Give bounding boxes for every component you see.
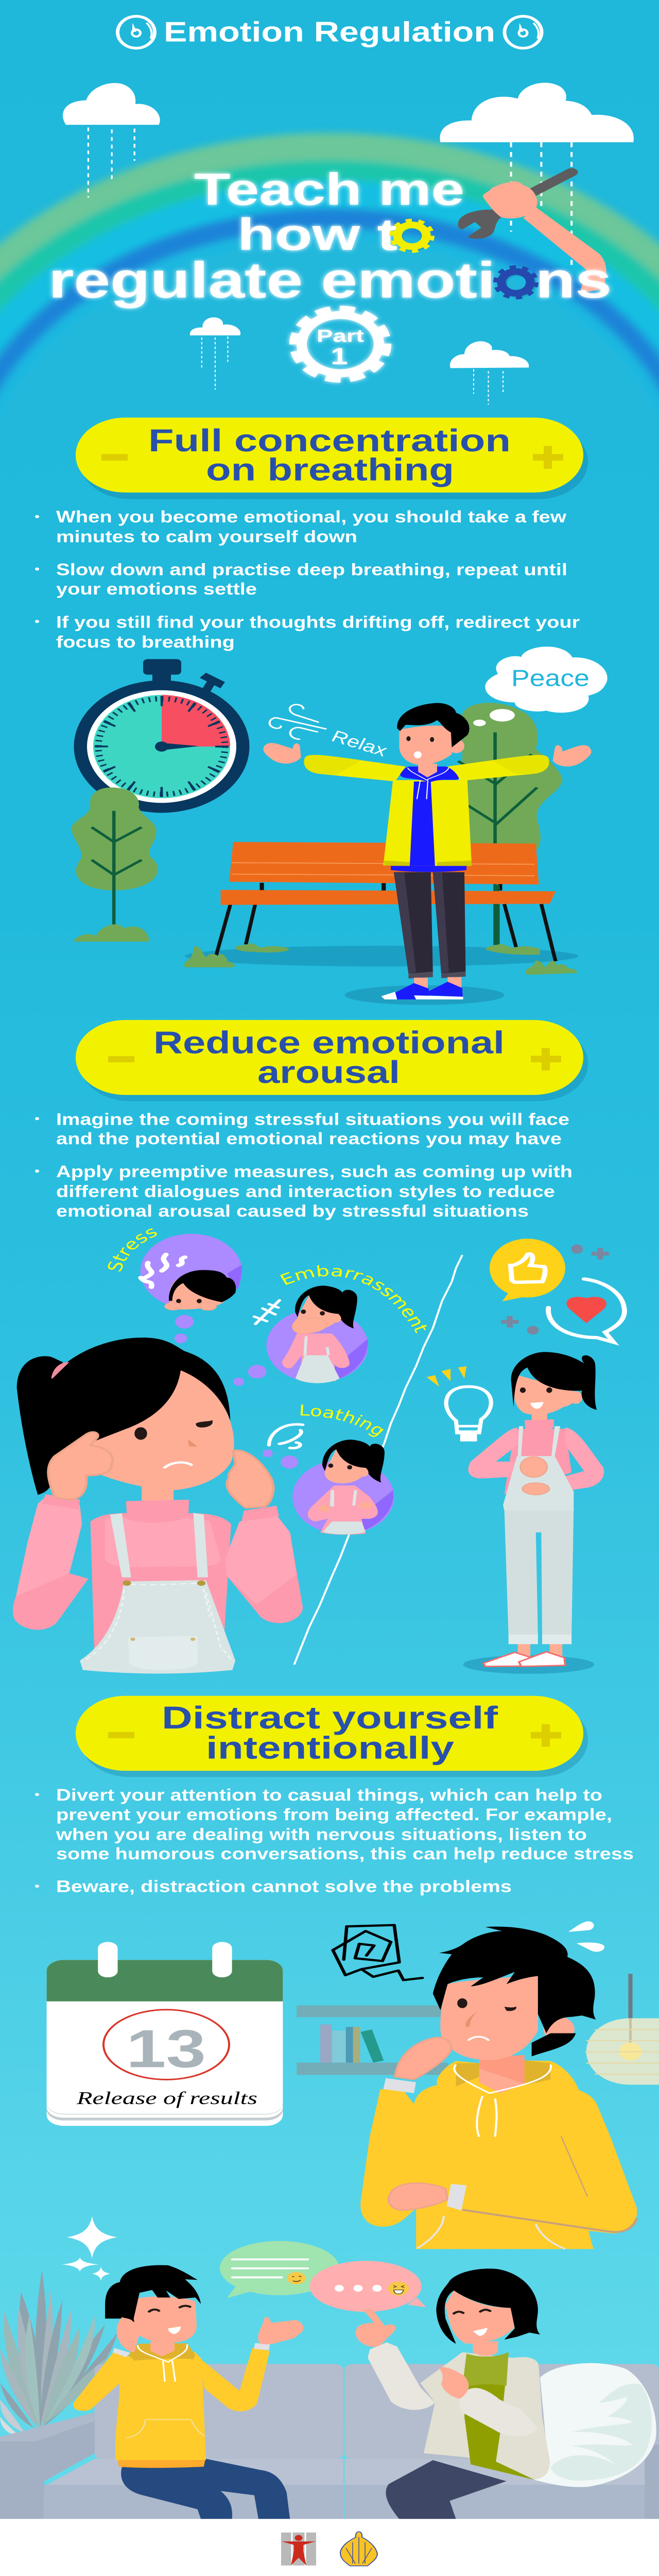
icon: blue gear xyxy=(496,267,536,298)
shelf with books xyxy=(297,2006,448,2075)
rainbow xyxy=(0,129,659,397)
hands xyxy=(263,743,301,764)
boy on phone xyxy=(73,2265,303,2519)
sweat drops xyxy=(568,1921,604,1952)
logo: hands emblem xyxy=(340,2532,377,2566)
worried man in yellow hoodie xyxy=(360,1927,637,2249)
lightbulb icon xyxy=(427,1366,491,1442)
smiling girl standing xyxy=(463,1352,604,1674)
potted plant leaves xyxy=(0,2269,118,2436)
bullet list: arousal: different dialogues and interaction styles to reduce xyxy=(56,1182,555,1201)
thought: Stress: Stress xyxy=(108,1228,157,1272)
heading pill: Distract yourself intentionally: Distract yourself xyxy=(162,1700,498,1736)
hands xyxy=(48,1432,113,1500)
bullet list: arousal: Apply preemptive measures, such as coming up with xyxy=(56,1163,573,1181)
bullet list: distraction: Divert your attention to casual things, which can help to xyxy=(56,1786,602,1805)
heading pill: Full concentration on breathing: on breathing xyxy=(206,452,454,487)
title: Teach me how to regulate emotions: regulate emotions xyxy=(48,252,612,309)
title: Teach me how to regulate emotions: Teach me xyxy=(194,164,464,214)
big tree behind man xyxy=(458,703,562,945)
jacket xyxy=(304,755,406,782)
hair xyxy=(17,1337,230,1495)
thumbs-up bubble xyxy=(490,1239,609,1301)
bullet list: distraction: prevent your emotions from being affected. For example, xyxy=(56,1806,612,1824)
bullet list: breathing: focus to breathing xyxy=(56,633,235,651)
clouds with rain xyxy=(63,83,634,404)
bullet list: breathing: If you still find your thoughts drifting off, redirect your xyxy=(56,613,580,632)
heading pill: Reduce emotional arousal: arousal xyxy=(257,1055,400,1090)
sofa xyxy=(0,2364,659,2519)
thought cloud: Peace xyxy=(473,647,608,726)
heading pill: Full concentration on breathing: Full concentration xyxy=(148,423,511,459)
bullet list: distraction: when you are dealing with nervous situations, listen to xyxy=(56,1825,587,1844)
bullet list: arousal: Imagine the coming stressful situations you will face xyxy=(56,1110,569,1129)
crack divider xyxy=(294,1255,462,1665)
heading pill: Reduce emotional arousal: Reduce emotional xyxy=(153,1025,505,1060)
girl pointing xyxy=(356,2268,550,2519)
calendar: Release of results: 13 xyxy=(126,2019,206,2078)
heart bubble xyxy=(501,1279,625,1342)
shadow under feet xyxy=(344,985,505,1005)
bullet list: arousal: emotional arousal caused by stressful situations xyxy=(56,1202,529,1221)
bullet list: breathing: Slow down and practise deep breathing, repeat until xyxy=(56,561,567,579)
chat bubble: pink xyxy=(310,2261,426,2312)
bullet list: breathing: your emotions settle xyxy=(56,580,257,599)
calendar: Release of results: Release of results xyxy=(76,2088,257,2108)
thought: Embarrassment xyxy=(233,1265,427,1386)
icon: yellow gear xyxy=(392,221,432,251)
sparkles xyxy=(62,2216,117,2281)
thought: Embarrassment: Embarrassment xyxy=(280,1265,427,1333)
thought: Loathing: Loathing xyxy=(301,1404,384,1437)
hanging lamp xyxy=(585,1974,659,2084)
bullet list: arousal: and the potential emotional reactions you may have xyxy=(56,1130,562,1148)
small tree left xyxy=(72,787,158,942)
thought: Loathing xyxy=(263,1404,394,1535)
chat bubble: green xyxy=(220,2241,339,2298)
title: Teach me how to regulate emotions xyxy=(48,164,612,309)
bullet list: breathing: When you become emotional, you should take a few xyxy=(56,508,566,527)
big girl thinking xyxy=(13,1337,303,1673)
bullet list: distraction xyxy=(35,1786,634,1896)
bullet list: arousal xyxy=(35,1110,573,1221)
pillow xyxy=(534,2363,656,2487)
face xyxy=(84,1370,234,1490)
footer band xyxy=(0,2519,659,2576)
bench xyxy=(184,842,578,975)
badge: Part 1 gear: Part xyxy=(317,326,365,346)
Relax label: Relax xyxy=(328,726,391,760)
head xyxy=(447,739,464,753)
scribble thought icon xyxy=(333,1925,422,1980)
heading pill: Reduce emotional arousal xyxy=(76,1020,588,1101)
header: Emotion Regulation: Emotion Regulation xyxy=(164,16,495,48)
logo: health department xyxy=(281,2533,316,2566)
heading pill: Distract yourself intentionally xyxy=(76,1696,588,1777)
icon: arm holding wrench xyxy=(458,172,606,293)
bullet list: distraction: Beware, distraction cannot solve the problems xyxy=(56,1877,512,1896)
title: Teach me how to regulate emotions: how to xyxy=(237,209,435,260)
heading pill: Distract yourself intentionally: intentionally xyxy=(206,1731,454,1766)
hood and neck xyxy=(400,767,459,783)
man with arms spread xyxy=(263,703,591,1005)
bullet list: breathing: minutes to calm yourself down xyxy=(56,528,357,546)
thought: Stress xyxy=(82,1228,263,1364)
bullet list: breathing xyxy=(35,508,580,651)
stopwatch xyxy=(74,659,249,813)
calendar: Release of results xyxy=(47,1942,283,2126)
thought cloud: Peace: Peace xyxy=(511,665,589,691)
heading pill: Full concentration on breathing xyxy=(76,417,588,499)
wind icon xyxy=(270,705,326,739)
legs xyxy=(381,872,465,999)
badge: Part 1 gear: 1 xyxy=(331,344,348,369)
badge: Part 1 gear xyxy=(294,309,387,379)
